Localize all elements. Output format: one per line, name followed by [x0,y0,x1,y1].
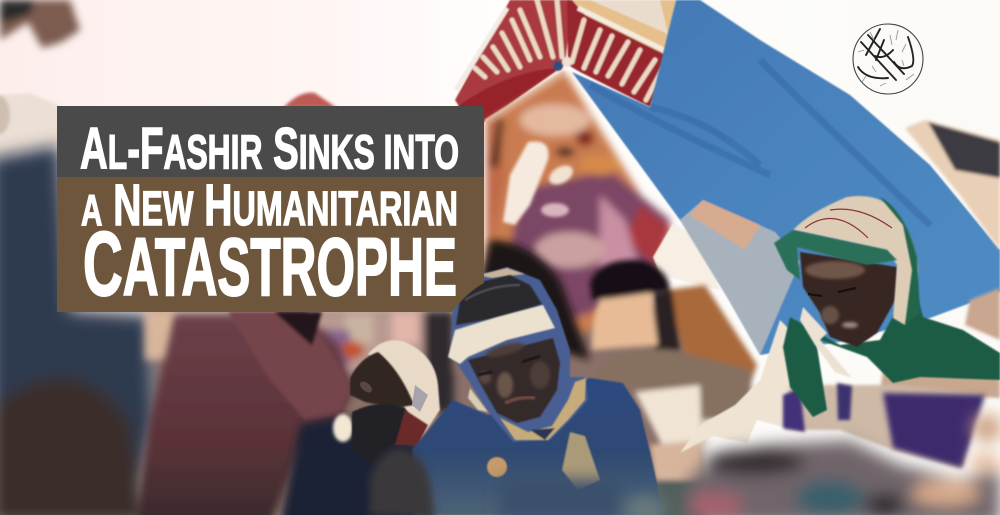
headscarf [793,196,918,325]
scarf [450,267,588,442]
white scarf strip [800,307,852,378]
lower robe and purple garment [785,385,980,468]
title panel [57,106,484,315]
scarf print [468,268,600,490]
white triangle [653,223,720,290]
dark hair blob at lower cloth [480,240,590,360]
old woman with green scarf [680,196,1000,468]
foreground blurred objects [685,414,1000,515]
sleeping child with white headwrap [333,340,440,465]
dress [412,378,664,515]
girl in blue dress and bandage [412,267,665,515]
title line 2: A NEW HUMANITARIAN [81,173,458,238]
foreground dark blurred head [370,448,435,515]
blue tarp [572,0,1000,355]
title line 1: AL-FASHIR SINKS INTO [80,116,459,182]
seated person with dark hair and beige cloth [590,260,757,515]
lower background wash [150,310,700,515]
white robe [680,320,800,453]
logo: circular calligraphy seal [853,24,923,94]
person in maroon cloth [135,312,352,515]
white bright shapes in cloth [503,141,576,225]
right tent [905,120,1000,340]
beige band at left [0,93,60,160]
tent canopy with red and white stripes [455,0,676,126]
title band: brown [57,177,484,312]
title line 3: CATASTROPHE [83,214,457,315]
face [800,252,897,347]
blurred top-left shape [0,0,80,48]
hair [456,275,542,325]
red blob above title [283,93,337,108]
bandage [448,305,555,364]
dark blurred figure at left [0,145,155,515]
green shawl [783,280,1000,417]
face [468,338,560,423]
dark clothing under the sleeping child [280,415,430,515]
tan cloth [880,340,1000,398]
foreground blur over dress [500,480,665,515]
background crowd band [145,310,455,412]
title band: grey [57,106,484,177]
patterned cloth behind figures [486,72,672,340]
